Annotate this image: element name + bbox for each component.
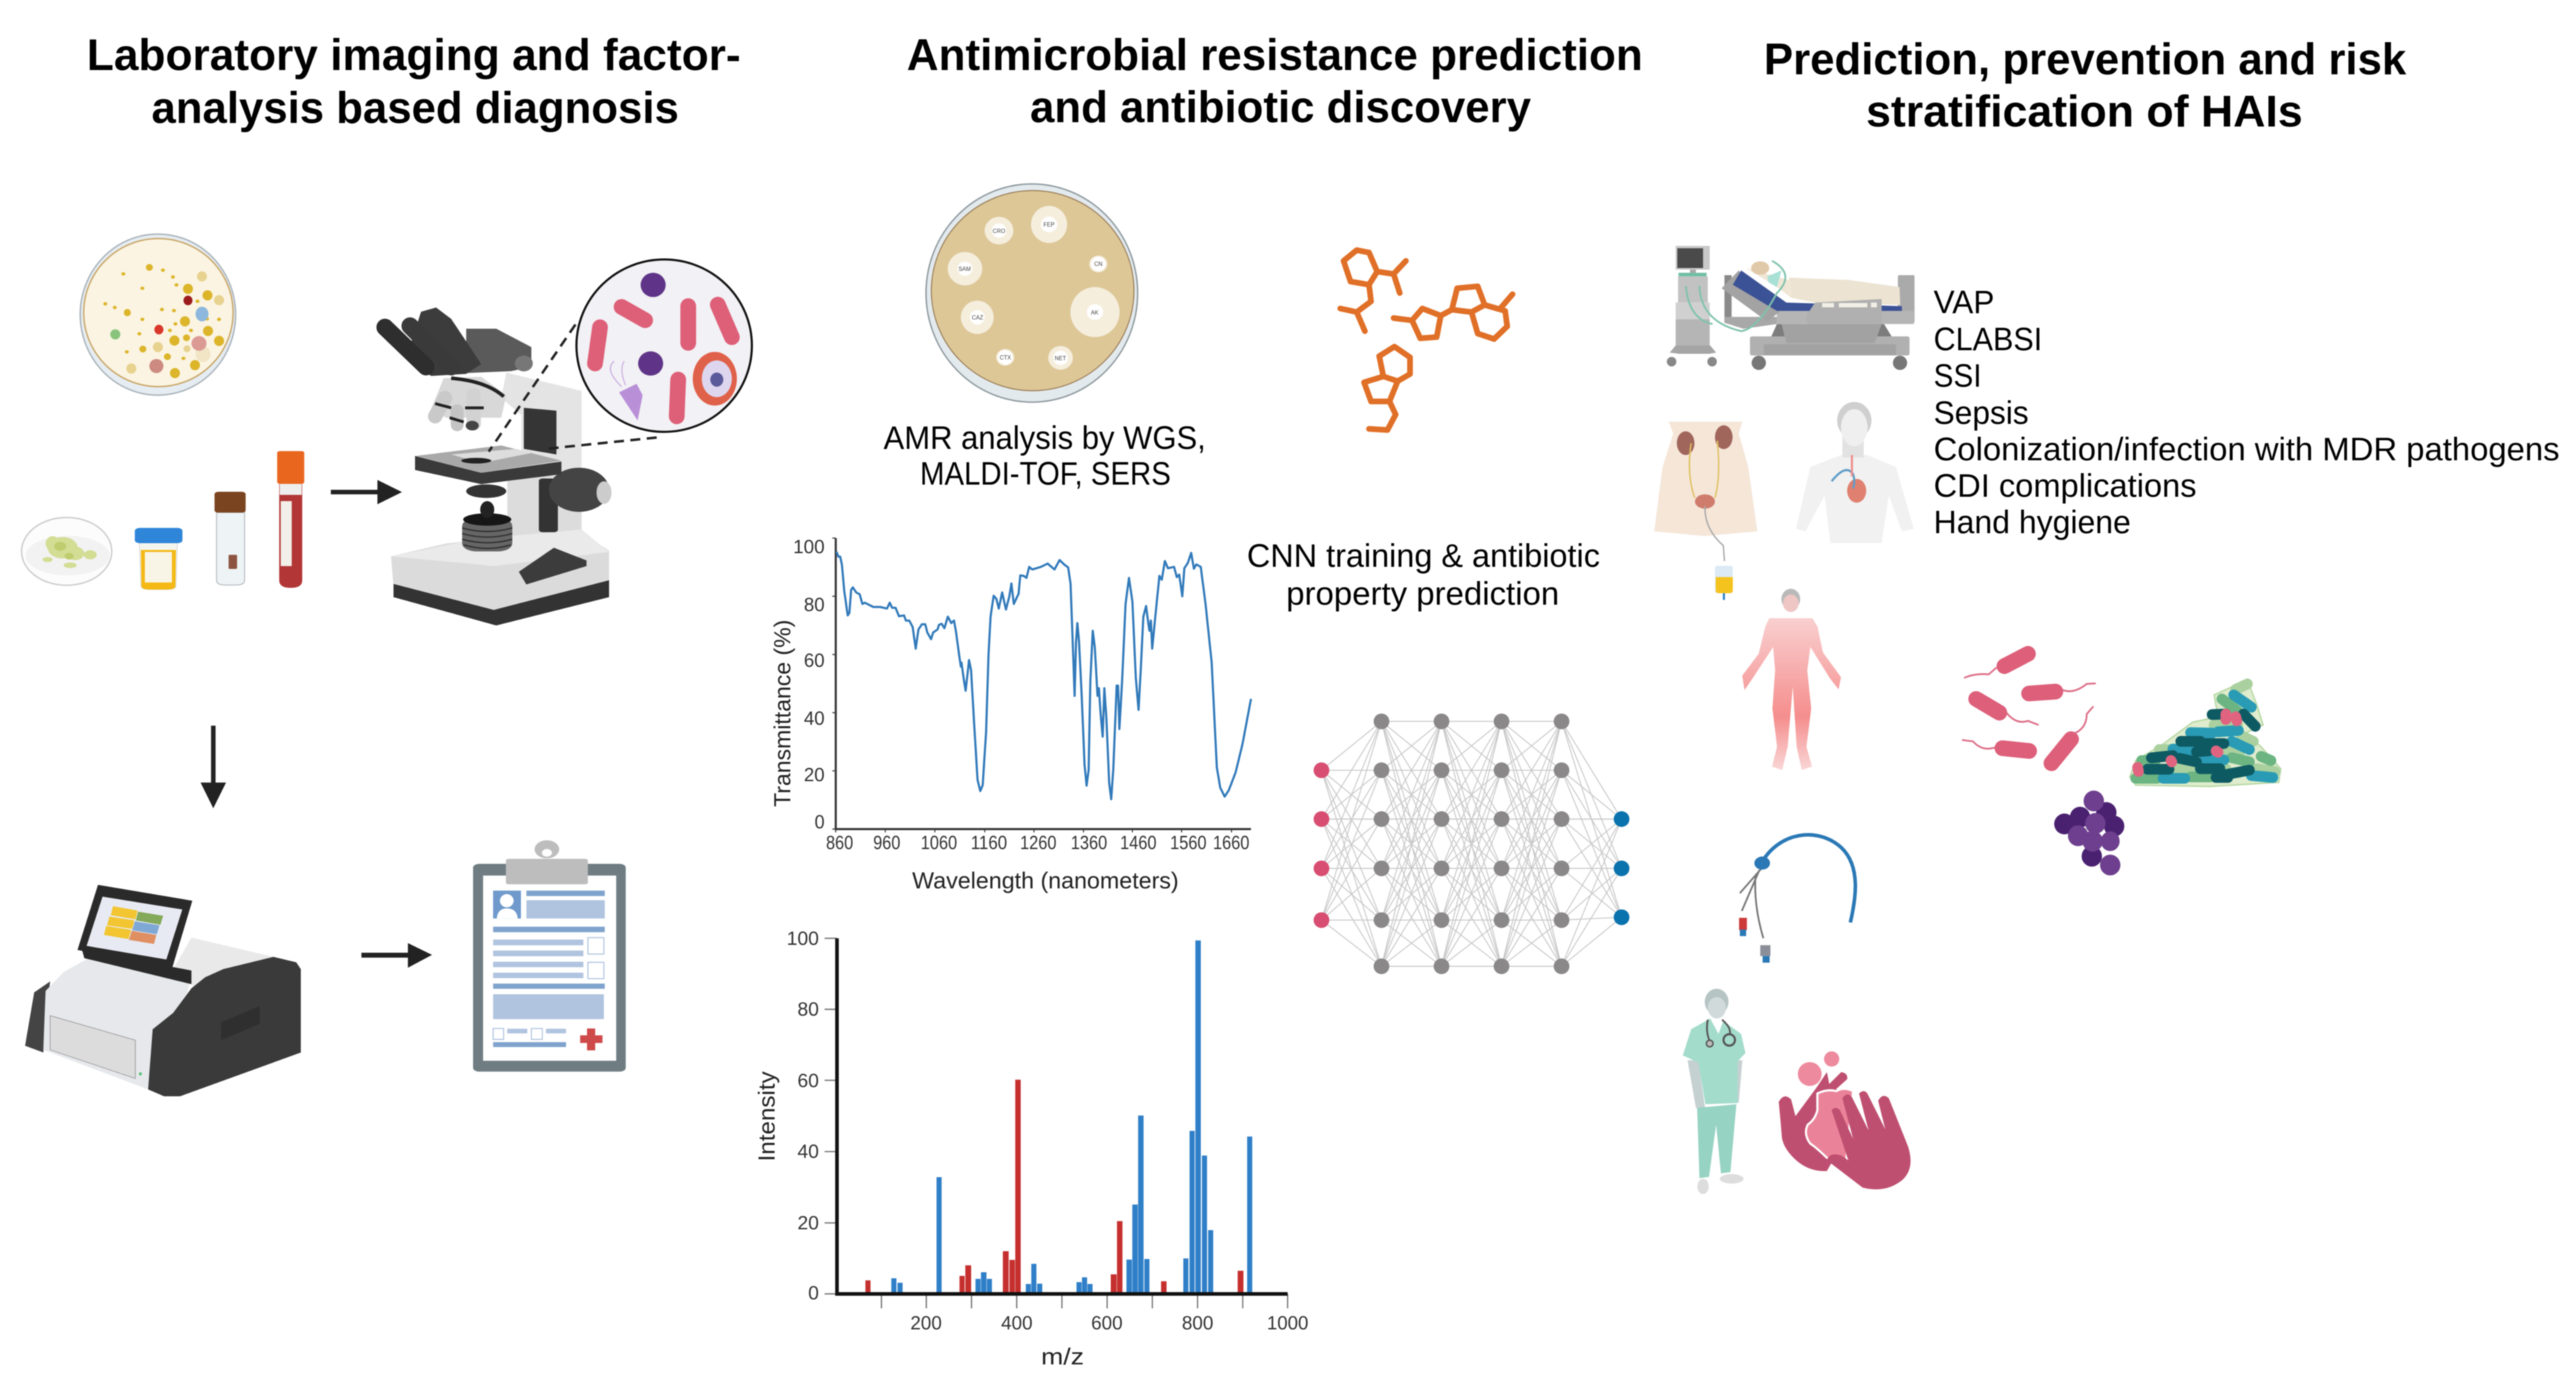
line chart: transmittance spectrum: 20 xyxy=(804,764,825,785)
icon: central venous catheter xyxy=(1739,835,1855,963)
icon: automated analyser xyxy=(25,885,301,1096)
heading: laboratory imaging: analysis based diagnosis xyxy=(151,84,679,133)
line chart: transmittance spectrum: Wavelength (nanometers) xyxy=(912,868,1179,893)
list: infection types: Sepsis xyxy=(1934,395,2029,431)
icon: antibiotic disc diffusion plate: CTX xyxy=(1000,355,1012,361)
line chart: transmittance spectrum: 100 xyxy=(793,536,825,557)
caption: AMR analysis: AMR analysis by WGS, xyxy=(883,420,1206,456)
icon: blood tube xyxy=(277,451,304,588)
line chart: transmittance spectrum: Transmittance (%) xyxy=(770,620,795,807)
icon: culture plate with colonies xyxy=(80,234,236,395)
line chart: transmittance spectrum xyxy=(770,536,1251,893)
line chart: transmittance spectrum: 1360 xyxy=(1070,832,1108,853)
line chart: transmittance spectrum: 0 xyxy=(815,811,825,833)
icon: biofilm xyxy=(2130,680,2281,786)
icon: antibiotic disc diffusion plate: SAM xyxy=(958,266,971,272)
caption: CNN training: property prediction xyxy=(1286,575,1559,612)
heading: antimicrobial resistance: Antimicrobial resistance prediction xyxy=(907,31,1643,80)
caption: CNN training: CNN training & antibiotic xyxy=(1247,537,1600,574)
icon: urine cup xyxy=(135,528,182,590)
line chart: transmittance spectrum: 1560 xyxy=(1170,832,1206,853)
icon: ventilated patient in bed xyxy=(1667,246,1914,370)
bar chart: mass spectrum: Intensity xyxy=(754,1071,780,1161)
list: infection types xyxy=(1934,284,2560,540)
bar chart: mass spectrum: 100 xyxy=(787,928,819,949)
list: infection types: Colonization/infection with MDR pathogens xyxy=(1934,431,2560,467)
line chart: transmittance spectrum: 960 xyxy=(873,832,900,853)
line chart: transmittance spectrum: 860 xyxy=(826,832,853,853)
icon: stool swab tube xyxy=(214,492,246,585)
icon: orange molecules xyxy=(1341,250,1513,430)
bar chart: mass spectrum: 60 xyxy=(797,1070,819,1091)
diagram: neural network xyxy=(1313,713,1629,974)
icon: sputum dish xyxy=(21,517,111,585)
line chart: transmittance spectrum: 60 xyxy=(804,650,825,671)
bar chart: mass spectrum: 1000 xyxy=(1267,1312,1308,1334)
line chart: transmittance spectrum: 1160 xyxy=(970,832,1008,853)
icon: motile bacteria xyxy=(1962,654,2096,763)
icon: human body sepsis xyxy=(1742,589,1841,770)
icon: torso with central line xyxy=(1796,402,1914,543)
heading: laboratory imaging: Laboratory imaging and factor- xyxy=(87,31,740,80)
icon: antibiotic disc diffusion plate: CRO xyxy=(993,228,1005,234)
list: infection types: VAP xyxy=(1934,284,1994,320)
bar chart: mass spectrum: 80 xyxy=(797,998,819,1020)
bar chart: mass spectrum: 0 xyxy=(808,1282,819,1304)
list: infection types: CDI complications xyxy=(1934,467,2197,504)
bar chart: mass spectrum: 200 xyxy=(910,1312,942,1334)
icon: healthcare worker xyxy=(1683,988,1746,1194)
icon: antibiotic disc diffusion plate: FEP xyxy=(1043,222,1055,228)
icon: hand washing xyxy=(1779,1051,1911,1189)
icon: antibiotic disc diffusion plate: AK xyxy=(1091,309,1099,316)
icon: antibiotic disc diffusion plate: CAZ xyxy=(972,314,983,321)
dashed zoom lines xyxy=(489,324,657,452)
icon: antibiotic disc diffusion plate: NET xyxy=(1055,355,1066,362)
caption: AMR analysis: MALDI-TOF, SERS xyxy=(920,455,1170,492)
list: infection types: SSI xyxy=(1934,357,1981,394)
line chart: transmittance spectrum: 40 xyxy=(804,708,825,729)
list: infection types: CLABSI xyxy=(1934,321,2042,357)
icon: microscope xyxy=(385,307,612,625)
arrow: samples to microscope xyxy=(331,480,402,504)
heading: prediction and prevention of HAIs: Prediction, prevention and risk xyxy=(1764,35,2407,84)
heading: prediction and prevention of HAIs: stratification of HAIs xyxy=(1866,87,2302,137)
list: infection types: Hand hygiene xyxy=(1934,504,2131,540)
bar chart: mass spectrum: 600 xyxy=(1091,1312,1123,1334)
bar chart: mass spectrum: 400 xyxy=(1001,1312,1033,1334)
icon: urinary catheter xyxy=(1654,422,1757,600)
bar chart: mass spectrum: m/z xyxy=(1041,1344,1084,1369)
arrow: analyser to report xyxy=(362,943,432,968)
line chart: transmittance spectrum: 1260 xyxy=(1020,832,1056,853)
icon: clipboard report xyxy=(473,841,626,1071)
icon: antibiotic disc diffusion plate xyxy=(926,184,1138,402)
line chart: transmittance spectrum: 1460 xyxy=(1120,832,1156,853)
arrow: microscope to analyser xyxy=(201,725,226,808)
icon: antibiotic disc diffusion plate: CN xyxy=(1094,261,1103,267)
line chart: transmittance spectrum: 1060 xyxy=(920,832,958,853)
bar chart: mass spectrum xyxy=(754,928,1308,1369)
bar chart: mass spectrum: 40 xyxy=(797,1141,819,1162)
line chart: transmittance spectrum: 1660 xyxy=(1213,832,1249,853)
bar chart: mass spectrum: 20 xyxy=(797,1212,819,1234)
line chart: transmittance spectrum: 80 xyxy=(804,594,825,615)
heading: antimicrobial resistance: and antibiotic discovery xyxy=(1030,83,1531,132)
icon: magnified microbes xyxy=(577,259,752,432)
bar chart: mass spectrum: 800 xyxy=(1182,1312,1213,1334)
icon: cocci cluster xyxy=(2054,790,2124,876)
